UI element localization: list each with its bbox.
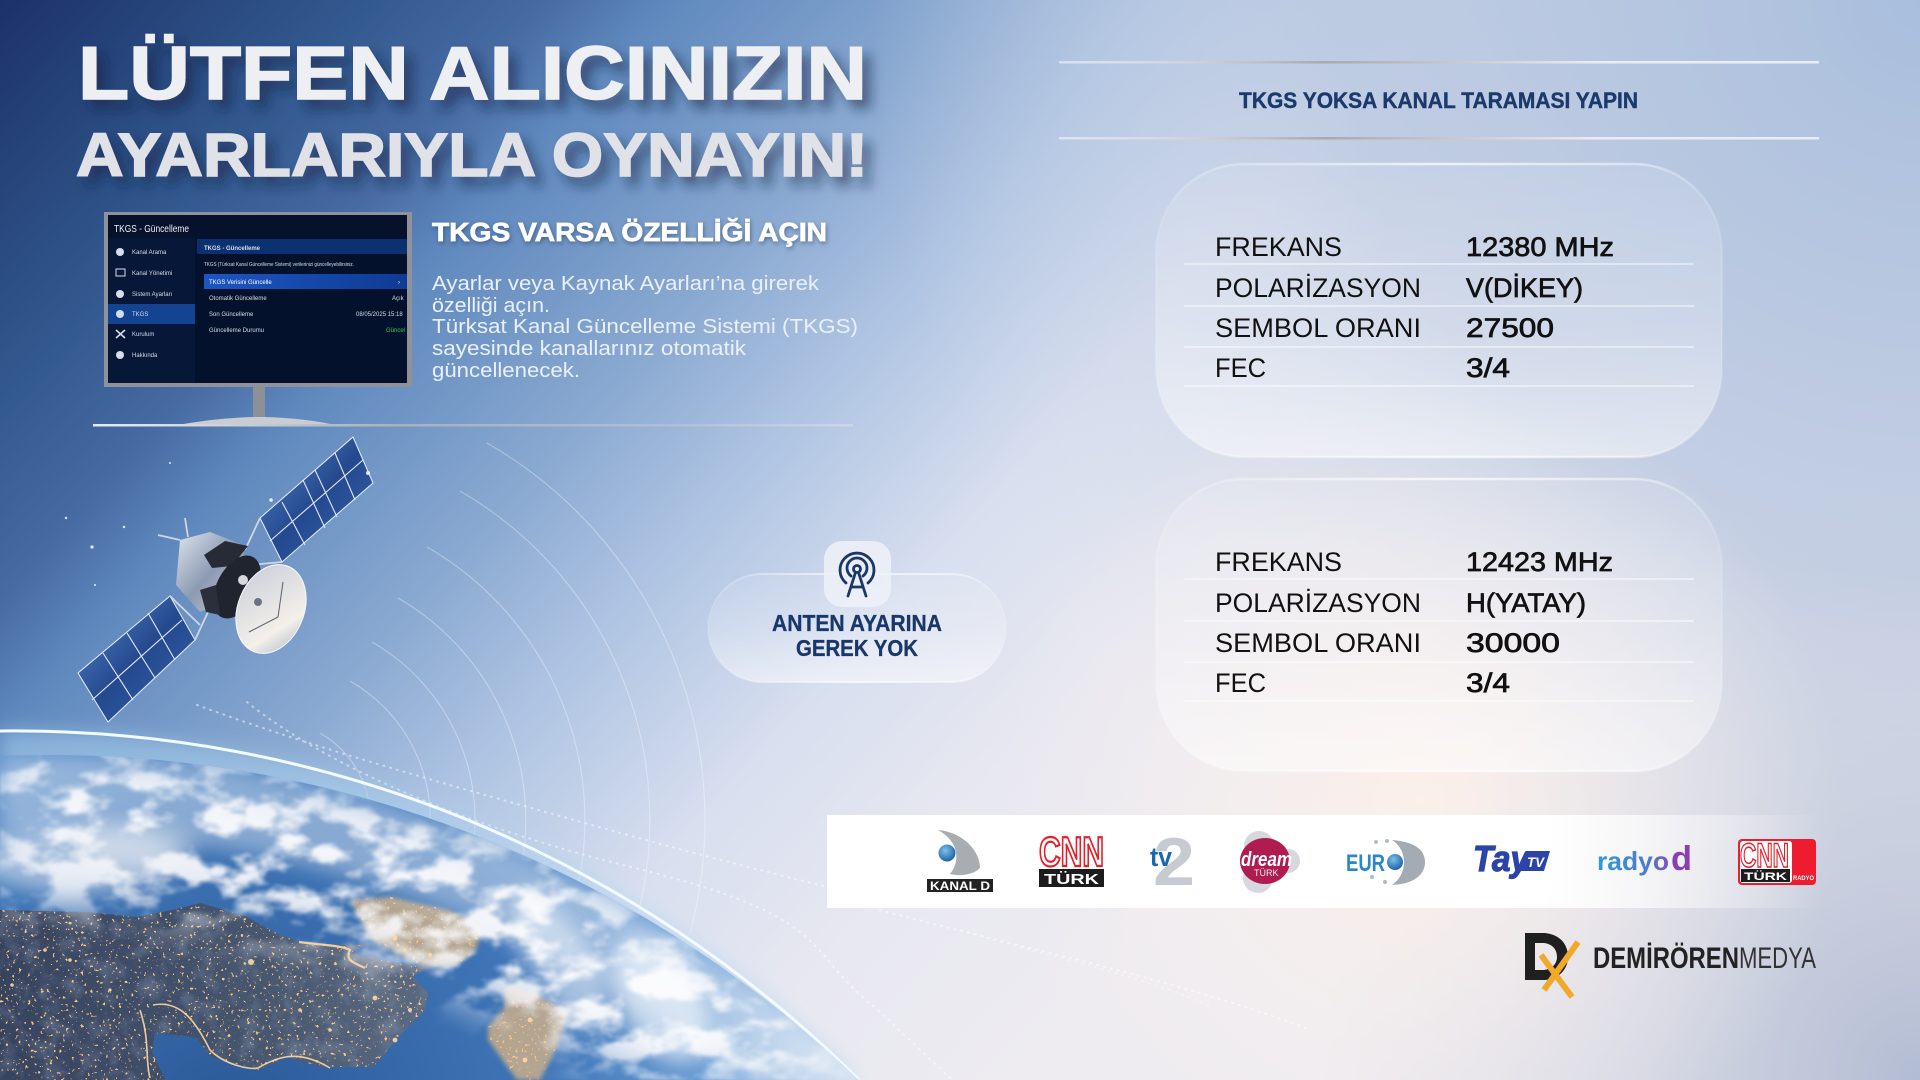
coastline city lights xyxy=(10,935,532,1078)
table rows 2: FREKANS xyxy=(1215,547,1342,577)
callout text: GEREK YOK xyxy=(796,635,918,661)
table rows 2: SEMBOL ORANI xyxy=(1215,628,1421,658)
title: LÜTFEN ALICINIZIN xyxy=(78,31,867,115)
logo: CNN Türk Radyo: RADYO xyxy=(1793,876,1814,882)
feature heading: TKGS VARSA ÖZELLİĞİ AÇIN xyxy=(432,217,827,247)
table rows 1: SEMBOL ORANI xyxy=(1215,313,1421,343)
screen sidebar: TKGS xyxy=(132,312,148,318)
logos bar xyxy=(827,815,1822,908)
logo: Dream Türk: dream xyxy=(1241,849,1292,871)
solar panel lower xyxy=(78,596,195,722)
screen sidebar: Sistem Ayarları xyxy=(132,292,173,298)
table rows 2: FEC xyxy=(1215,668,1266,698)
solar panel upper xyxy=(260,437,373,562)
screen content: Otomatik Güncelleme xyxy=(209,296,267,302)
table rows 1: 12380 MHz xyxy=(1466,232,1614,262)
logo: CNN Türk Radyo: TÜRK xyxy=(1744,870,1787,883)
table rows 1: 27500 xyxy=(1466,313,1554,343)
screen content: Son Güncelleme xyxy=(209,312,254,318)
logo: Tay TV: TV xyxy=(1527,854,1546,870)
screen sidebar xyxy=(108,238,195,383)
logo mark xyxy=(1525,933,1578,997)
logo: tv2: tv xyxy=(1150,842,1172,872)
logo: Tay TV: Tay xyxy=(1473,838,1531,879)
dotted data streams xyxy=(197,702,1311,1078)
table rows 1: V(DİKEY) xyxy=(1466,272,1583,303)
screen sidebar: Kanal Yönetimi xyxy=(132,271,172,277)
monitor stand xyxy=(172,387,340,426)
icon: antenna tower xyxy=(824,541,891,607)
table rows 1: 3/4 xyxy=(1466,353,1510,383)
logo: CNN Türk: TÜRK xyxy=(1044,871,1099,888)
left divider xyxy=(93,424,853,426)
logo: CNN Türk: CNN xyxy=(1039,828,1104,875)
monitor with TKGS update screen xyxy=(104,212,412,426)
panel: transponder 1 xyxy=(1156,164,1722,457)
star sparkles xyxy=(65,462,370,586)
screen content xyxy=(197,239,407,334)
table rows 2: 12423 MHz xyxy=(1466,547,1613,577)
screen content: 08/05/2025 15:18 xyxy=(356,312,403,318)
logo: Kanal D xyxy=(927,830,993,893)
table rows 1: FREKANS xyxy=(1215,232,1342,262)
screen sidebar: Hakkında xyxy=(132,353,158,359)
screen content: TKGS Verisini Güncelle xyxy=(209,280,272,286)
logo: Demirören Medya: MEDYA xyxy=(1739,942,1816,975)
screen content: Güncel xyxy=(386,328,405,334)
logo: CNN Türk xyxy=(1039,828,1104,888)
feature description: güncellenecek. xyxy=(432,360,580,382)
satellite xyxy=(65,437,373,722)
screen sidebar: Kanal Arama xyxy=(132,250,167,256)
logo: Euro D xyxy=(1346,839,1425,885)
earth xyxy=(0,723,860,1080)
logo: Radyo D xyxy=(1597,840,1692,878)
clouds on the limb xyxy=(0,755,855,1080)
land: lit peninsulas xyxy=(348,894,568,1080)
satellite arms and antenna xyxy=(158,518,282,640)
screen content: TKGS (Türksat Kanal Güncelleme Sistemi) verilerinizi güncelleyebilirsiniz. xyxy=(204,262,354,268)
screen header: TKGS - Güncelleme xyxy=(114,223,189,235)
satellite dish xyxy=(223,554,319,664)
table rows 1 xyxy=(1184,232,1694,386)
screen content: › xyxy=(398,280,400,286)
screen content: Açık xyxy=(392,296,405,302)
logo: Radyo D: d xyxy=(1671,840,1692,878)
feature description xyxy=(432,273,858,382)
signal rings xyxy=(320,443,705,933)
channel scan heading: TKGS YOKSA KANAL TARAMASI YAPIN xyxy=(1239,88,1638,113)
screen sidebar: Kurulum xyxy=(132,332,154,338)
screen content: TKGS - Güncelleme xyxy=(204,246,261,252)
table rows 1: FEC xyxy=(1215,353,1266,383)
title: AYARLARIYLA OYNAYIN! xyxy=(76,121,868,189)
feature description: sayesinde kanallarınız otomatik xyxy=(432,338,747,360)
panel: transponder 2 xyxy=(1156,479,1722,771)
logo: Dream Türk: TÜRK xyxy=(1254,868,1278,878)
logo: Demirören Medya xyxy=(1525,933,1816,997)
title xyxy=(76,31,868,189)
land: main night-side region xyxy=(0,900,440,1080)
feature description: Ayarlar veya Kaynak Ayarları’na girerek xyxy=(432,273,820,295)
satellite body xyxy=(176,532,271,626)
logo: Kanal D: KANAL D xyxy=(930,879,990,893)
logo: Euro D: EUR xyxy=(1346,850,1385,877)
feature description: Türksat Kanal Güncelleme Sistemi (TKGS) xyxy=(432,316,858,338)
top right rule 2 xyxy=(1059,137,1819,140)
callout text xyxy=(772,610,942,661)
top right rule 1 xyxy=(1059,61,1819,64)
feature description: özelliği açın. xyxy=(432,295,550,317)
table rows 2: 30000 xyxy=(1466,628,1560,658)
table rows 2: POLARİZASYON xyxy=(1215,587,1421,618)
logo: tv2: 2 xyxy=(1153,824,1195,900)
table rows 2: H(YATAY) xyxy=(1466,588,1586,618)
logo: Demirören Medya: DEMİRÖREN xyxy=(1593,942,1739,975)
callout: no antenna adjustment xyxy=(708,541,1006,682)
logo: Radyo D: radyo xyxy=(1597,846,1669,876)
logo: CNN Türk Radyo: CNN xyxy=(1740,837,1789,875)
logo: Dream Türk xyxy=(1240,831,1300,893)
table rows 2 xyxy=(1184,547,1694,701)
table rows 1: POLARİZASYON xyxy=(1215,272,1421,303)
callout text: ANTEN AYARINA xyxy=(772,610,942,636)
screen content: Güncelleme Durumu xyxy=(209,328,264,334)
table rows 2: 3/4 xyxy=(1466,668,1510,698)
screen header xyxy=(108,215,407,238)
